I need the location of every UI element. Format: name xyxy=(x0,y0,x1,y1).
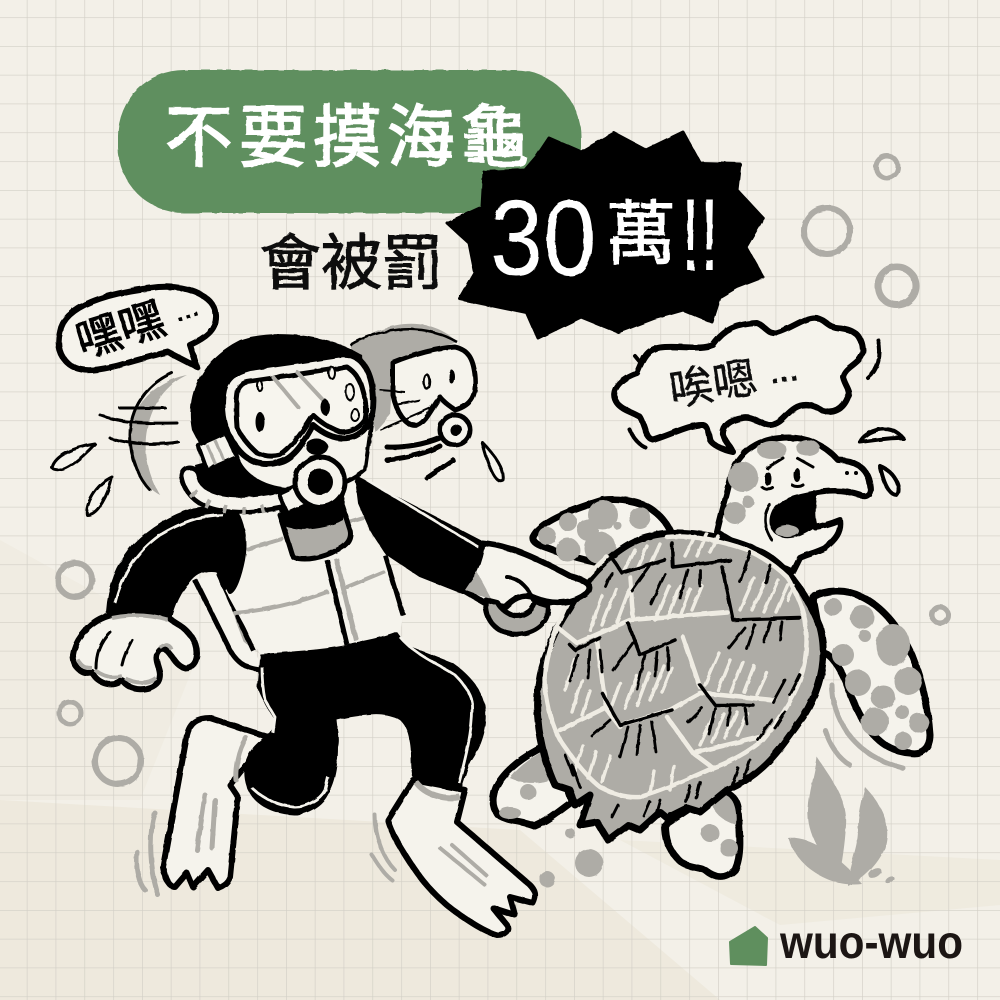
speech bubble: diver: … xyxy=(169,291,203,328)
starburst: fine amount: 萬 xyxy=(606,195,676,273)
flipper: front left xyxy=(533,500,672,565)
starburst: fine amount xyxy=(447,132,763,338)
right foot xyxy=(372,780,535,935)
hood xyxy=(190,334,372,455)
strap hatching xyxy=(207,440,224,465)
turtle xyxy=(493,429,930,877)
logo xyxy=(730,916,963,968)
diving mask xyxy=(222,355,373,464)
wetsuit shorts xyxy=(244,627,486,815)
mask strap xyxy=(198,433,237,470)
starburst: fine amount: !! xyxy=(681,178,719,292)
speech bubble: diver: 嘿嘿 xyxy=(70,292,171,368)
logo house icon xyxy=(730,927,767,965)
shell xyxy=(537,533,823,840)
title banner: 不要摸海龜 xyxy=(165,100,535,176)
starburst: fine amount: 30 xyxy=(490,177,596,298)
left hand xyxy=(73,613,197,689)
motion arc and sweat around head xyxy=(52,373,503,515)
nose xyxy=(306,439,328,455)
logo wordmark: wuo-wuo xyxy=(779,916,963,968)
flipper: front right xyxy=(813,591,930,753)
speech bubble: turtle: … xyxy=(766,354,801,391)
title banner xyxy=(118,70,581,213)
speech bubble: turtle xyxy=(614,318,880,452)
right hand xyxy=(463,543,589,634)
left arm sleeve xyxy=(108,508,245,618)
flipper: rear left xyxy=(493,743,572,826)
speech bubble: diver xyxy=(59,287,216,370)
left foot xyxy=(137,718,268,895)
hose highlight xyxy=(190,476,290,504)
seaweed xyxy=(788,757,896,886)
flipper: rear right xyxy=(665,792,740,877)
flipper motion lines xyxy=(825,685,903,768)
neck xyxy=(195,450,300,505)
turtle sweat xyxy=(860,429,903,495)
hose ribs xyxy=(190,490,264,515)
vest torso xyxy=(225,480,403,654)
shell pale hatching xyxy=(565,534,794,793)
pouch xyxy=(276,490,350,559)
shell black hatching xyxy=(565,552,800,817)
shell pale scute lines xyxy=(545,537,807,797)
speech bubble: turtle: 唉嗯 xyxy=(666,354,760,416)
grey bubbles xyxy=(58,156,948,887)
right arm sleeve xyxy=(357,478,483,592)
snorkel hose xyxy=(190,476,290,504)
face xyxy=(236,420,372,491)
back strap xyxy=(195,573,265,670)
subtitle: 會被罰 xyxy=(260,229,443,297)
motion ghost head xyxy=(350,324,475,478)
head xyxy=(717,437,870,572)
sleeve stripe xyxy=(367,480,480,548)
diver xyxy=(73,334,589,935)
mouthpiece xyxy=(278,457,345,514)
shell black scute lines xyxy=(570,543,800,725)
